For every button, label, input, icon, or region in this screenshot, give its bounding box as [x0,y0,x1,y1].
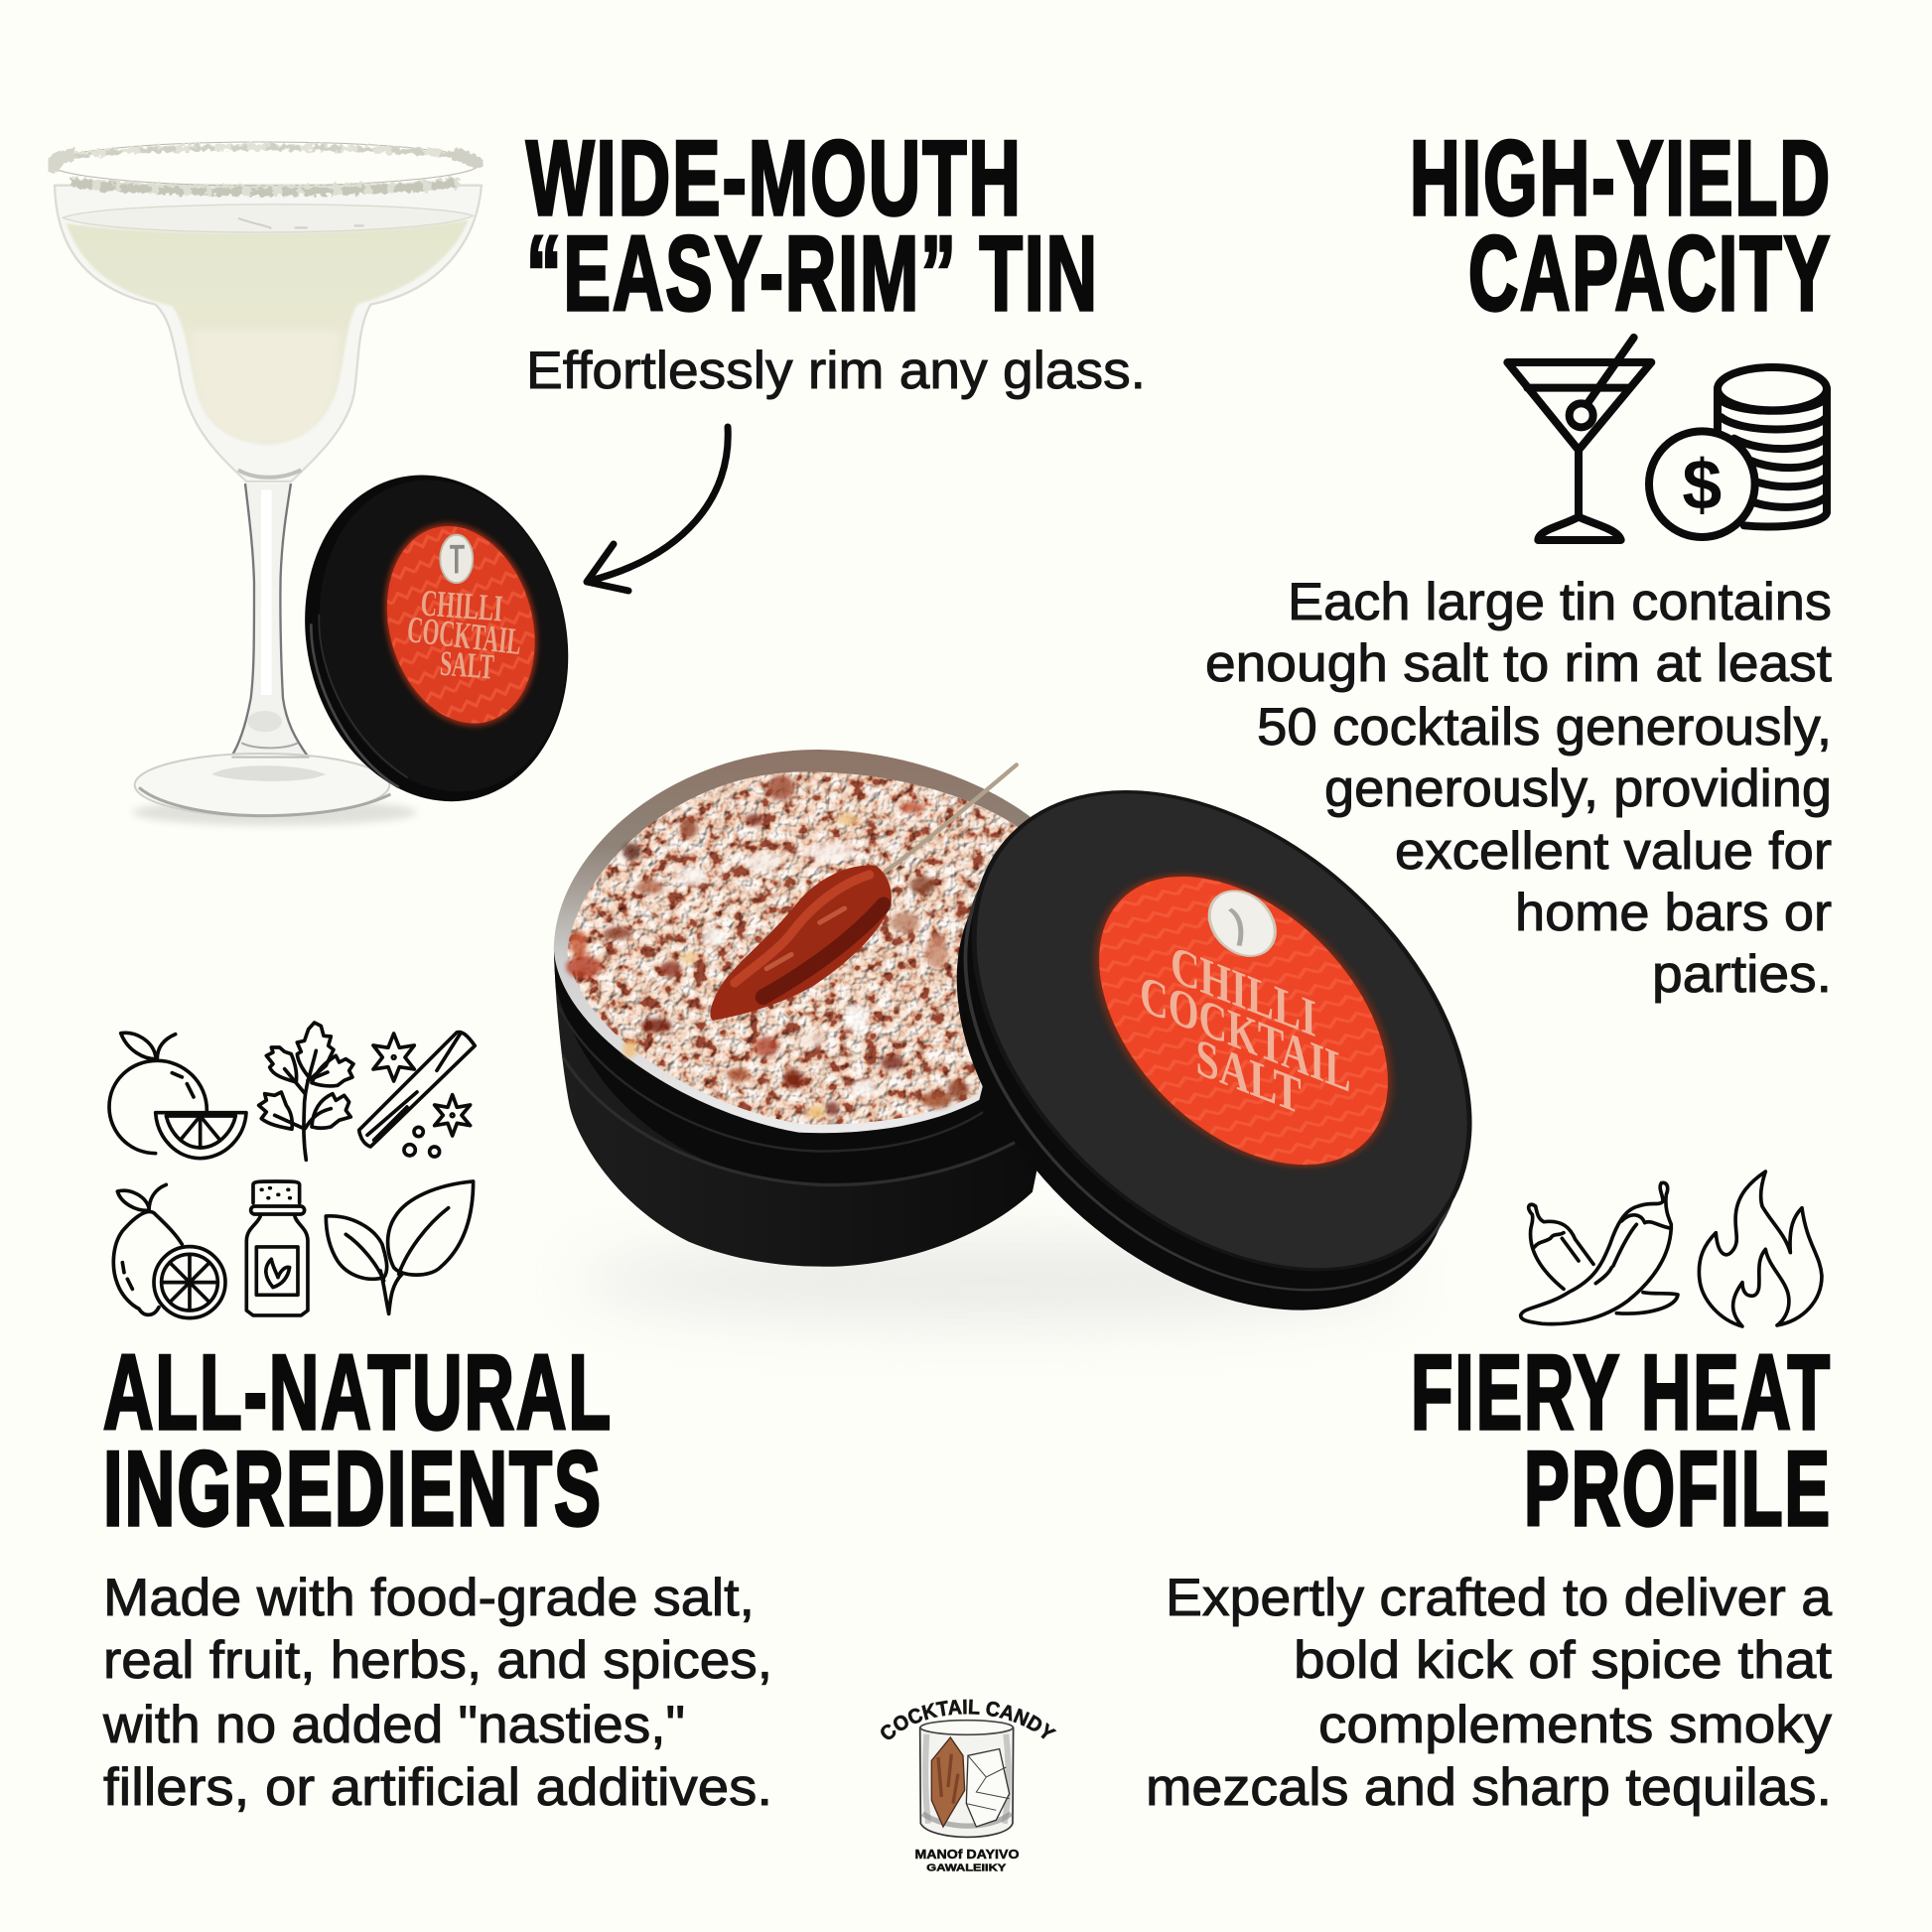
text: fiery heat body: mezcals and sharp tequilas. [1146,1758,1832,1817]
label: small lid red sticker: SALT [439,643,495,687]
glass foot and stem [132,483,417,826]
icon: leaves [326,1181,474,1313]
salt rim [50,142,482,192]
arrow: to small lid [587,427,728,591]
text: high-yield body: home bars or [1515,884,1832,942]
heading: all-natural [103,1332,613,1548]
text: wide-mouth body: Effortlessly rim any glass. [526,342,1146,400]
icon: small chili [1529,1204,1593,1289]
text: high-yield body: enough salt to rim at least [1205,634,1832,693]
label: small lid red sticker [359,499,563,750]
logo: candy shard [931,1737,965,1827]
logo: tagline: GAWALEIIKY [926,1863,1007,1874]
text: fiery heat body [1146,1569,1833,1817]
icon: flame [1699,1172,1822,1326]
label: large lid red sticker: COCKTAIL [1140,963,1351,1104]
heading: wide-mouth [526,118,1099,333]
floor shadow [576,1239,1410,1322]
text: all-natural body [102,1569,772,1817]
icon: cinnamon and star anise [359,1033,475,1157]
glass bowl [50,142,482,482]
large lid [859,745,1568,1357]
icon: orange with slice [109,1033,246,1159]
open tin [554,750,1036,1267]
text: fiery heat body: bold kick of spice that [1294,1631,1832,1690]
icon: martini and coins [1507,338,1827,540]
icons: natural ingredients [109,1023,475,1318]
photo: margarita glass [50,142,482,826]
logo: tagline: MANOf DAYIVO [914,1847,1019,1862]
text: high-yield body: excellent value for [1395,822,1832,881]
text: high-yield body: Each large tin contains [1288,573,1832,631]
label: large lid red sticker: SALT [1195,1027,1302,1126]
icon: lemon with slice [113,1184,225,1318]
icon: coin stack [1649,367,1827,537]
text: all-natural body: Made with food-grade salt, [103,1569,755,1627]
text: all-natural body: fillers, or artificial additives. [103,1758,772,1817]
icon: spice bottle [246,1181,308,1315]
heading: wide-mouth: “EASY-RIM” TIN [526,213,1099,333]
icon: martini [1507,338,1651,540]
icons: chilies and flame [1521,1172,1822,1326]
heading: wide-mouth: WIDE-MOUTH [526,118,1023,237]
logo: cocktail candy [881,1700,1056,1874]
label: small lid red sticker: COCKTAIL [405,609,523,662]
icon: dollar sign: $ [1682,446,1722,525]
text: all-natural body: real fruit, herbs, and spices, [103,1631,772,1690]
text: high-yield body [1205,573,1832,1004]
dried chili [710,764,1017,1021]
label: large lid red sticker: CHILLI [1171,933,1316,1048]
text: high-yield body: 50 cocktails generously, [1257,698,1832,757]
heading: high-yield [1410,118,1832,333]
icon: large chili [1521,1182,1678,1324]
photo: small tin lid [263,435,610,842]
text: fiery heat body: Expertly crafted to deliver a [1166,1569,1833,1627]
tin rim [554,750,1046,1133]
text: high-yield body: generously, providing [1324,759,1832,818]
text: all-natural body: with no added "nasties," [102,1696,685,1754]
icon: parsley [259,1023,353,1160]
text: high-yield body: parties. [1652,945,1832,1004]
heading: fiery heat [1411,1332,1832,1548]
heading: all-natural: ALL-NATURAL [103,1332,613,1451]
logo: tagline [914,1847,1019,1874]
photo: open tin with salt and chili [536,745,1568,1357]
label: large lid red sticker [1036,846,1450,1195]
heading: all-natural: INGREDIENTS [103,1429,603,1548]
logo: tumbler [920,1721,1014,1837]
salt flakes [566,775,969,1119]
label: small lid red sticker: CHILLI [420,582,504,629]
logo: brand name: COCKTAIL CANDY [881,1700,1056,1739]
salt fill [567,771,1033,1125]
tin body [554,947,1036,1267]
text: fiery heat body: complements smoky [1318,1696,1833,1754]
